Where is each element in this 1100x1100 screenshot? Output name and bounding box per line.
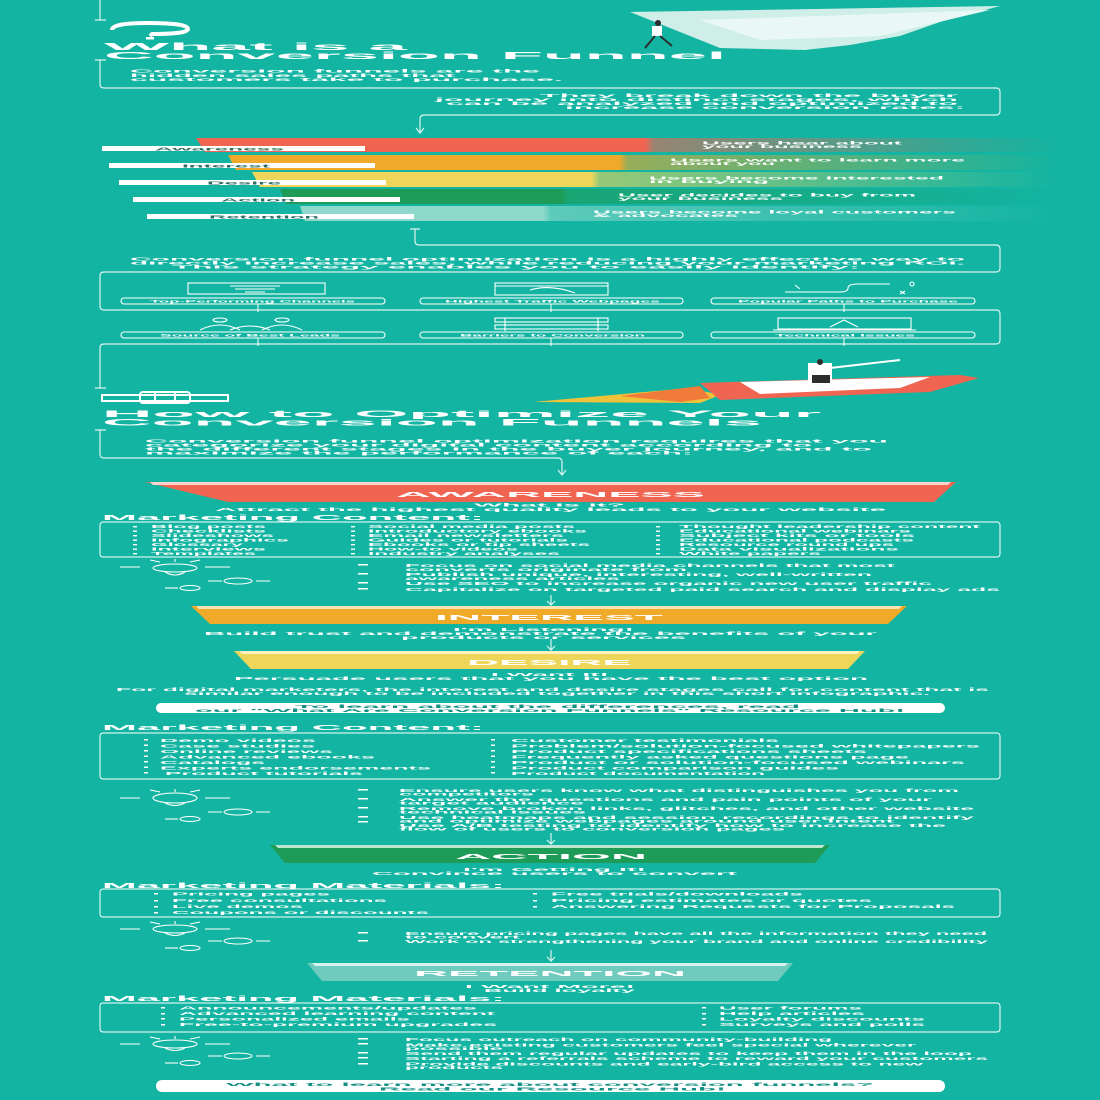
tips: retention: Provide discounts and early-bird access to new [405, 1061, 926, 1066]
tips: retention: Make existing customers feel special wherever [405, 1042, 917, 1047]
text block: break down journey: increase conversion rates: [565, 105, 968, 111]
panel: action materials list: Pricing estimates or quotes [551, 898, 874, 903]
tips: interest/desire: Ensure users know what distinguishes you from [399, 788, 959, 793]
funnel band: retention: Retention [209, 214, 320, 220]
arrow: to desire [547, 639, 555, 650]
tips: awareness: Focus on social media channels that most [405, 563, 897, 568]
text: desire description: Persuade users that you have the best option [234, 676, 869, 681]
tips: awareness: Capitalize on targeted paid search and display ads [405, 587, 1002, 592]
panel: retention materials list: Surveys and polls [719, 1022, 927, 1027]
panel: awareness content list: Blog posts [151, 524, 270, 529]
tips: awareness: Publish unique, interesting, well-written [405, 572, 873, 577]
text block: optimization requires: maximize the performance of each: [145, 450, 696, 456]
text: desire description [234, 672, 869, 681]
tips: interest/desire: target audience [399, 800, 587, 805]
text block: funnels definition: hidden sales paths that [130, 73, 457, 79]
item: popular paths to purchase: Popular Paths to Purchase [738, 300, 958, 304]
tips: interest/desire: Use heatmaps and session recordings to identify [399, 815, 977, 820]
panel: retention materials list: User forums [719, 1006, 864, 1010]
callout pill: resource hub link [156, 703, 945, 713]
tips: interest/desire: Answer the questions and pain points of your [399, 797, 934, 802]
icon grid: identify items [121, 282, 975, 346]
funnel band: awareness: Awareness [155, 146, 287, 152]
illustration: man with paper funnel [630, 6, 1000, 50]
funnel band: desire: Desire [207, 180, 284, 186]
item: technical issues [711, 318, 975, 346]
funnel band: action [133, 189, 1060, 204]
banner: desire: DESIRE [467, 658, 632, 667]
tips: awareness: converts originate from [405, 567, 687, 572]
text: desire description: I Want It! [491, 672, 612, 677]
funnel band: interest [109, 155, 1060, 170]
arrow: to action [547, 833, 555, 844]
panel: retention materials list: Announcements/updates [179, 1006, 479, 1010]
icon: lightbulbs action [120, 921, 270, 950]
text block: break down journey: They break down the buyer [540, 93, 959, 99]
item: barriers to conversion: Barriers to Conversion [460, 334, 648, 338]
banner: retention: RETENTION [414, 969, 686, 978]
panel: awareness content list: Data visualizations [679, 546, 903, 552]
text: awareness what is it: What is it? [474, 502, 626, 508]
panel: interest/desire content list: Online reviews [160, 749, 335, 754]
tips: interest/desire: technical issues [399, 809, 589, 814]
heading: marketing materials action: Marketing Materials: [102, 883, 505, 890]
connector lines section 1 [95, 0, 1000, 388]
funnel band: interest: Users want to learn more [670, 158, 969, 162]
panel: awareness content list: Glossary [151, 542, 246, 547]
text block: funnels definition [130, 68, 563, 83]
text: action description: I'm Getting It! [463, 867, 649, 872]
panel: awareness content list: Educational webinars [679, 528, 915, 534]
text: interest and desire note: For digital marketers, the interest and desire stages call for content that is [116, 687, 991, 692]
text block: optimization requires [145, 438, 888, 456]
text block: optimization is effective: Conversion funnel optimization is a highly effective way to [130, 256, 965, 262]
panel: awareness content list: Ebooks or tip sheets [368, 542, 594, 547]
panel: awareness content list: Educational podcasts [679, 538, 918, 542]
banner: awareness: AWARENESS [396, 490, 705, 499]
panel: action materials list: Free consultations [172, 898, 389, 903]
panel: awareness content list: Email newsletters [368, 533, 568, 538]
panel: awareness content list: Templates [151, 551, 259, 556]
tips: interest/desire: Use A/B testing to identify how to increase the [399, 823, 949, 828]
panel: interest/desire content list: Experts endorsements [160, 766, 433, 770]
funnel band: action: Action [221, 198, 296, 202]
text block: funnels definition: Conversion funnels are the [130, 68, 542, 74]
panel: awareness content list: Interviews [151, 546, 270, 552]
banner: action: ACTION [455, 852, 647, 861]
banner: retention [307, 963, 793, 981]
text: retention description: I Want More! [465, 984, 638, 989]
text: action description [372, 867, 740, 876]
tips: interest/desire: competitors [399, 791, 537, 796]
panel: awareness content list [100, 522, 1000, 557]
text: interest and desire note: similar enough to be included together in this short infographic. [184, 691, 930, 696]
panel: action materials list: Coupons or discounts [172, 910, 431, 915]
panel: awareness content list: White papers [679, 551, 825, 556]
panel: awareness content list: Resource round ups [679, 542, 898, 547]
banner: awareness [145, 482, 956, 502]
item: top-performing channels: Top-Performing Channels [150, 300, 355, 304]
funnel band: desire: Users become interested [649, 176, 947, 180]
callout pill: learn more: Read our Resource Hub! [379, 1086, 729, 1092]
panel: interest/desire content list: Product comparison guides [511, 766, 841, 770]
callout pill: learn more: What to learn more about conversion funnels? [226, 1082, 875, 1087]
panel: action materials list: Free trials/downloads [551, 892, 805, 896]
illustration: rocket man [533, 359, 979, 403]
heading: marketing materials retention: Marketing Materials: [102, 996, 505, 1003]
banner: interest [191, 606, 907, 624]
text: retention description [465, 984, 638, 993]
panel: interest/desire content list: Frequently asked questions page [511, 754, 911, 760]
icon: gear [102, 392, 228, 403]
text: interest description [204, 627, 878, 640]
item: technical issues: Technical Issues [775, 334, 915, 338]
panel: action materials list: Live demos [172, 904, 305, 909]
panel: retention materials list [100, 1003, 1000, 1032]
icon: question mark [112, 23, 188, 40]
item: source of best leads: Source of Best Leads [160, 334, 340, 338]
funnel band: desire [119, 172, 1060, 187]
text block: funnels definition: customers take to purchase. [130, 77, 563, 83]
panel: awareness content list: How-to videos [368, 546, 521, 552]
tips: interest/desire [358, 788, 977, 831]
panel: interest/desire content list: Product tutorials [165, 771, 365, 776]
banner: action [270, 845, 830, 863]
panel: interest/desire content list: Product specifications sheets [511, 749, 869, 754]
arrow: to retention [547, 950, 555, 961]
panel: action materials list: Answering Requests for Proposals [551, 904, 957, 909]
text: interest and desire note [116, 687, 991, 696]
icon: lightbulbs desire [120, 789, 270, 822]
callout pill: learn more [156, 1080, 945, 1092]
title: How to Optimize: Conversion Funnels [102, 418, 762, 428]
panel: retention materials list: Personalized emails [179, 1016, 412, 1022]
funnel band: retention [147, 206, 1060, 221]
panel: awareness content list: Subject kits or tools [679, 533, 919, 538]
tips: action: Work on strengthening your brand and online credibility [405, 939, 991, 944]
panel: action materials list [100, 889, 1000, 917]
panel: interest/desire content list [100, 733, 1000, 779]
panel: retention materials list: Free-to-premium upgrades [179, 1022, 499, 1027]
funnel band: awareness [102, 138, 1060, 152]
heading: marketing content interest/desire: Marketing Content: [102, 725, 484, 732]
panel: retention materials list: Advanced learning content [179, 1011, 497, 1016]
text: awareness what is it [215, 502, 889, 512]
funnel band: action: your business [618, 196, 787, 201]
banner: desire [234, 651, 865, 669]
icon: lightbulbs retention [120, 1036, 270, 1066]
funnel band: desire: in buying [649, 179, 772, 184]
text block: optimization is effective: directly increase sales, while reducing your marketing ROI. [130, 260, 965, 266]
title: What is a Conversion Funnel [104, 42, 728, 62]
item: source of best leads [121, 318, 385, 346]
text: awareness what is it: Attract the highest quality leads to your website [215, 507, 889, 512]
funnel band: retention: & advocates [593, 213, 742, 218]
text: retention description: Build loyalty [484, 988, 637, 993]
text block: optimization requires: categorize your digital content according to [145, 442, 812, 448]
funnel band: action: User decides to buy from [618, 192, 918, 198]
item: highest traffic webpages [420, 283, 683, 312]
funnel band: retention: Users become loyal customers [593, 210, 960, 214]
text: action description: Convince users to convert [372, 871, 740, 876]
panel: interest/desire content list: Product documentation [511, 771, 766, 776]
panel: interest/desire content list: Product or solution-focused webinars [511, 760, 967, 765]
callout pill: resource hub link: To learn about the differences, read [295, 704, 801, 709]
tips: retention [358, 1037, 991, 1070]
panel: interest/desire content list: Problem/solution-focused whitepapers [511, 744, 982, 748]
title: What is a Conversion Funnel: What is a [104, 42, 410, 53]
tips: retention: products [405, 1065, 506, 1070]
tips: action [358, 931, 991, 944]
arrow: to interest [547, 595, 555, 605]
text block: optimization requires: the different stages in the buyer journey, and to [145, 446, 872, 452]
panel: interest/desire content list: Case studies [160, 744, 317, 748]
text block: break down journey: can be analyzed and optimized to [446, 101, 958, 107]
tips: interest/desire: flow of users to conversion pages [399, 826, 788, 831]
funnel band: interest: Interest [182, 164, 273, 168]
text: interest description: products or services [401, 635, 689, 640]
tips: awareness [358, 563, 1002, 592]
funnel band: awareness: Users hear about [702, 140, 905, 146]
text block: optimization is effective [130, 256, 965, 270]
text block: optimization requires: Conversion funnel optimization requires that you [145, 438, 888, 444]
tips: awareness: Use SEO to increase organic new user traffic [405, 581, 934, 586]
panel: interest/desire content list: Advanced ebooks [160, 754, 377, 760]
tips: action: Ensure pricing pages have all the information they need [405, 931, 989, 936]
item: popular paths to purchase [711, 282, 975, 312]
tips: retention: Focus outreach on community-building [405, 1037, 834, 1042]
panel: interest/desire content list: Customer testimonials [511, 738, 781, 743]
title: How to Optimize [102, 409, 823, 428]
panel: interest/desire content list: Catalogs [160, 760, 267, 765]
panel: awareness content list: Guides or tutorials [368, 538, 572, 542]
panel: awareness content list: Slideshows [151, 533, 278, 538]
tips: interest/desire: Remove broken links, glitches, and other website [399, 806, 977, 811]
icon: lightbulbs awareness [120, 559, 270, 590]
tips: retention: Send them regular updates to keep them in the loop [405, 1051, 974, 1056]
text: interest description: I'm Listening! [453, 627, 637, 632]
funnel band: awareness: your business [702, 144, 866, 149]
connector section 2 [95, 430, 566, 475]
panel: awareness content list: Industry analyses [368, 551, 564, 556]
item: barriers to conversion [420, 318, 683, 346]
banner: interest: INTEREST [435, 613, 666, 622]
panel: action materials list: Pricing pages [172, 892, 332, 896]
panel: interest/desire content list: Demo videos [160, 738, 318, 743]
text block: optimization is effective: This strategy enables you to easily identify: [172, 264, 863, 270]
tips: retention: Starting a referrals scheme to reward your customers [405, 1056, 991, 1061]
panel: awareness content list: Checklists [151, 528, 270, 534]
panel: awareness content list: Infographics [151, 538, 293, 542]
callout pill: resource hub link: our "What Are Conversion Funnels" Resource Hub! [195, 708, 908, 713]
tips: action: to convert [405, 934, 523, 939]
text block: break down journey: journey into distinct stages, which [428, 97, 958, 103]
panel: retention materials list: Help articles [719, 1011, 867, 1016]
panel: awareness content list: Thought leadership content [679, 524, 983, 529]
tips: awareness: awareness articles [405, 576, 622, 581]
tips: retention: possible [405, 1046, 506, 1051]
item: highest traffic webpages: Highest Traffic Webpages [445, 300, 660, 304]
heading: marketing content awareness: Marketing Content: [102, 515, 484, 522]
panel: awareness content list: Social media posts [368, 524, 579, 529]
tips: interest/desire: and optimize webpages around user intent [399, 818, 897, 823]
item: top-performing channels [121, 283, 385, 312]
text: interest description: Build trust and demonstrate the benefits of your [204, 631, 878, 636]
funnel band: interest: about you [670, 161, 777, 166]
title: How to Optimize: How to Optimize Your [102, 409, 823, 420]
text block: break down journey [428, 93, 968, 111]
title: What is a Conversion Funnel: Conversion Funnel [104, 51, 728, 62]
panel: retention materials list: Loyalty discounts [719, 1016, 927, 1022]
panel: awareness content list: Introductory ebooks [368, 528, 591, 534]
funnel chart [102, 138, 1060, 221]
